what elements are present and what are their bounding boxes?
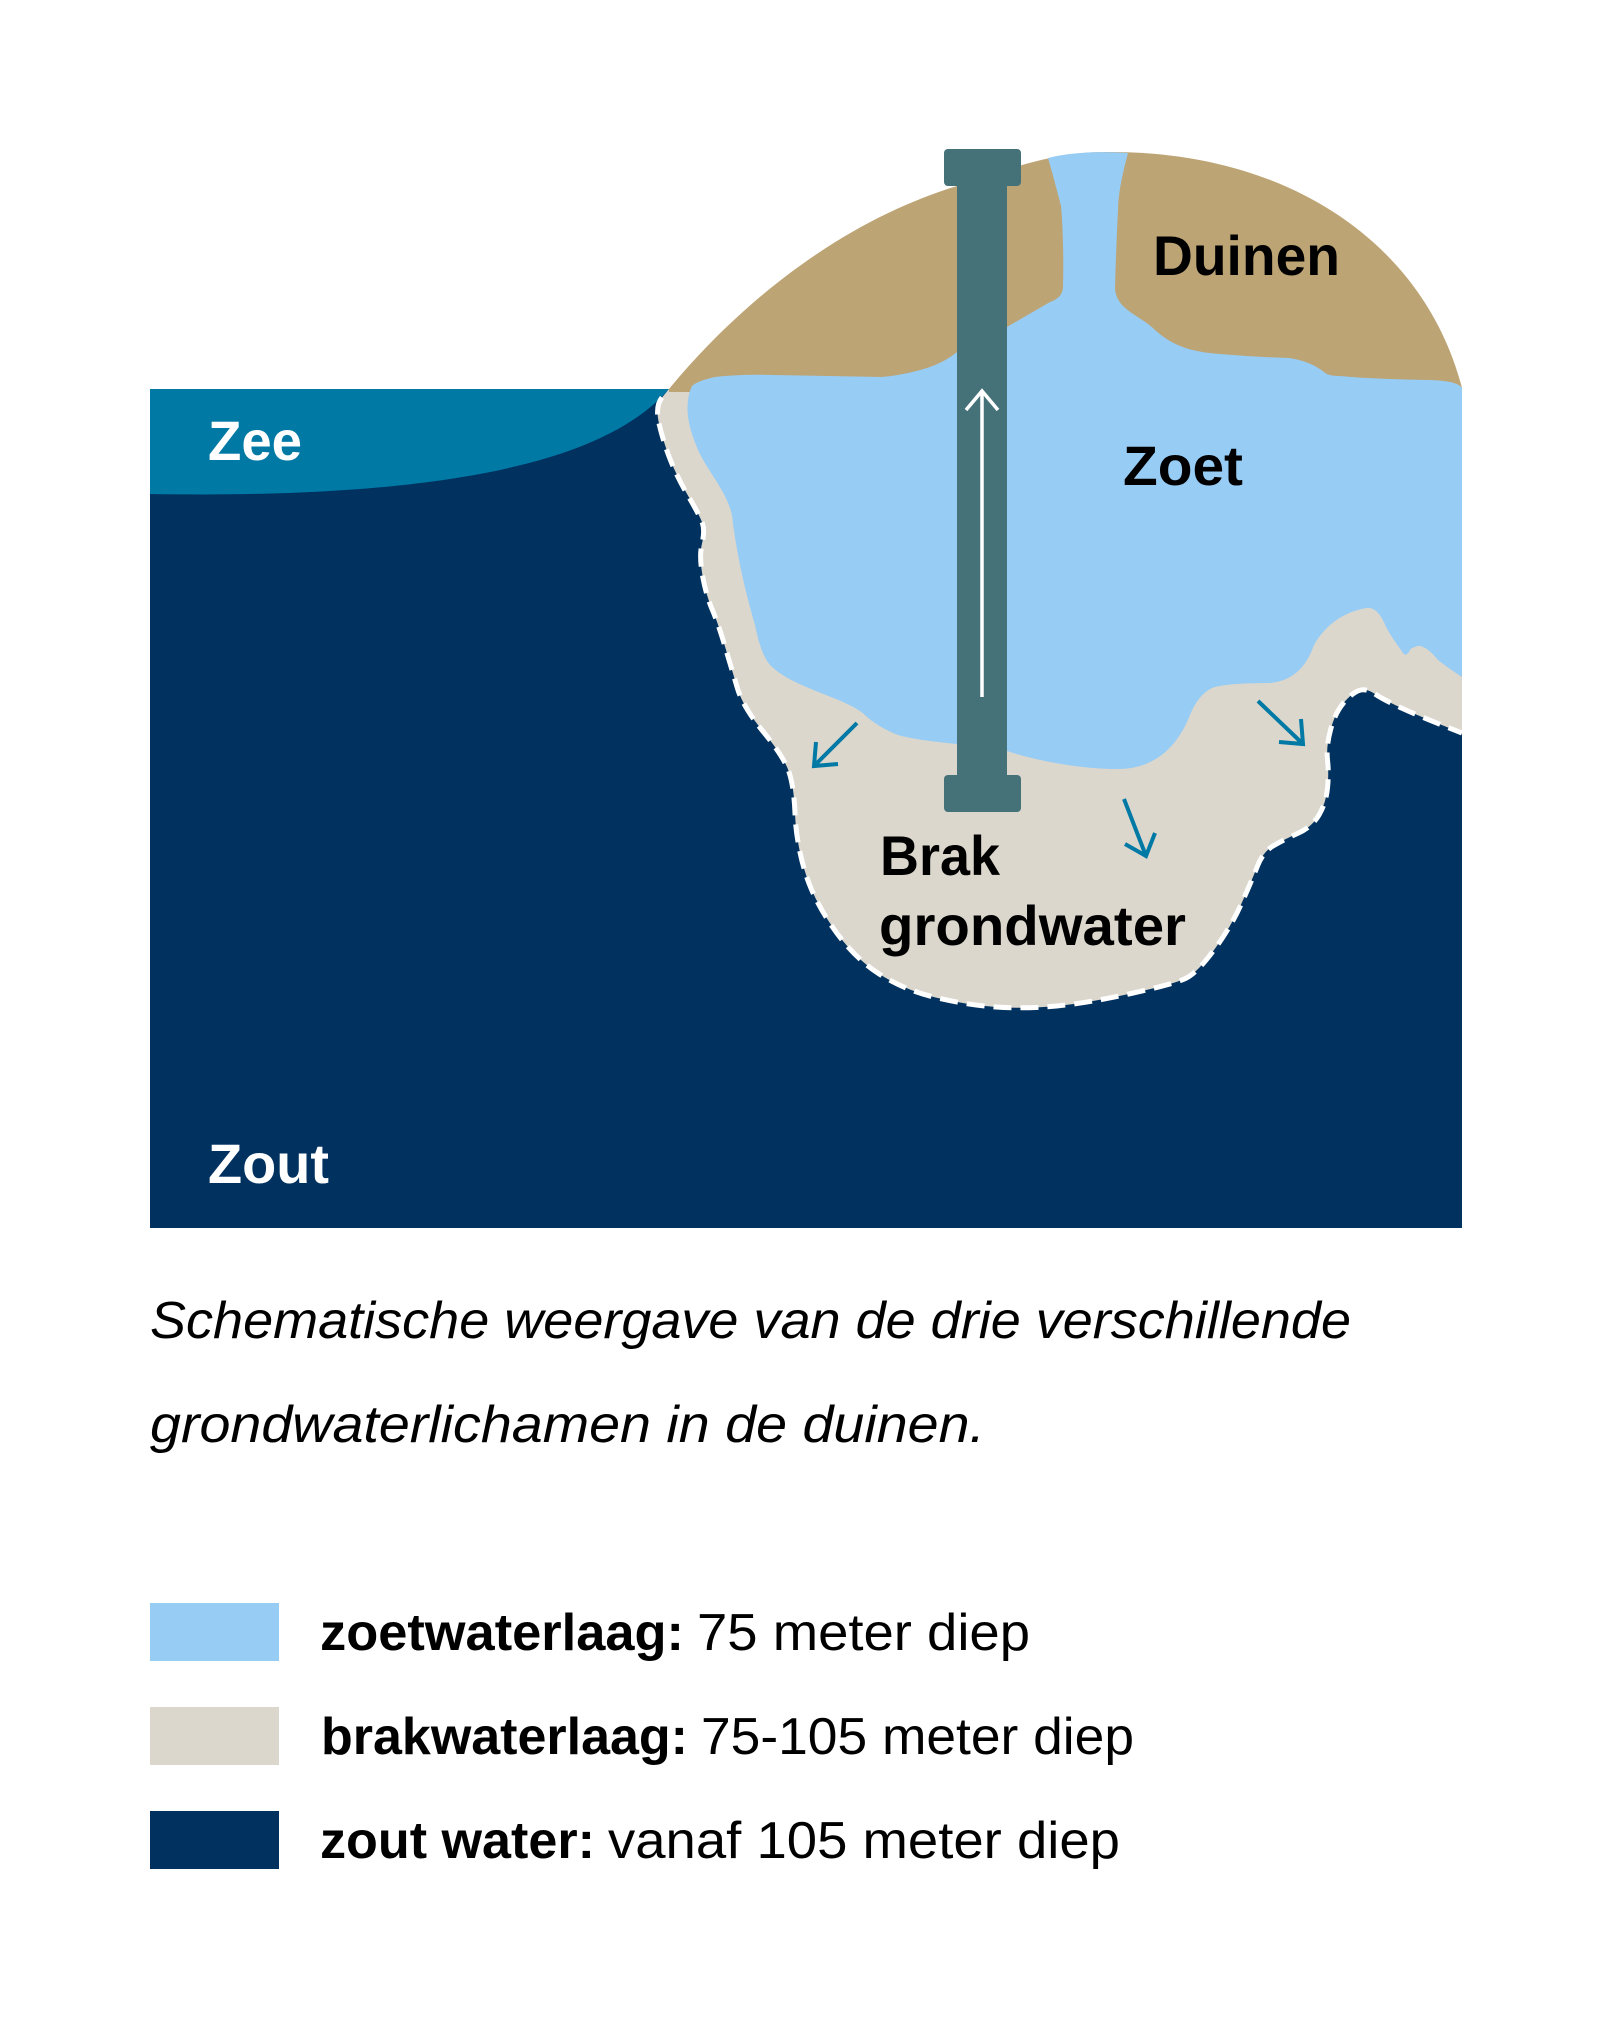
legend item: zoetwaterlaag <box>150 1603 1030 1662</box>
legend item: zoetwaterlaag: 75 meter diep <box>697 1604 1030 1662</box>
legend item: brakwaterlaag: brakwaterlaag: <box>321 1708 688 1766</box>
legend item: brakwaterlaag: 75-105 meter diep <box>701 1708 1134 1766</box>
legend item: zout water: vanaf 105 meter diep <box>608 1812 1120 1870</box>
arrow: pumped water upward <box>966 391 998 697</box>
diagram: dune groundwater cross-section <box>150 149 1462 1228</box>
arrow: brackish flow down <box>1124 799 1155 856</box>
label: Zout: Zout <box>208 1132 329 1195</box>
panel: dunes <box>669 152 1462 392</box>
caption <box>150 1292 1351 1454</box>
caption: Schematische weergave van de drie verschillende <box>150 1292 1351 1350</box>
label: Zoet: Zoet <box>1123 434 1243 497</box>
panel: brackish groundwater <box>658 389 1462 1008</box>
arrow: brackish flow right <box>1258 701 1303 744</box>
label: Brak grondwater <box>879 824 1186 957</box>
label: Zee: Zee <box>208 409 302 472</box>
legend item: brakwaterlaag <box>150 1707 1134 1766</box>
label: Brak grondwater: Brak <box>880 824 1001 887</box>
caption: grondwaterlichamen in de duinen. <box>150 1396 985 1454</box>
label: Duinen: Duinen <box>1153 224 1340 287</box>
label: Brak grondwater: grondwater <box>879 894 1186 957</box>
legend item: zoetwaterlaag: zoetwaterlaag: <box>320 1604 684 1662</box>
arrow: brackish flow left <box>814 723 857 766</box>
panel: sea <box>150 389 669 494</box>
icon: well pipe <box>944 149 1021 812</box>
dashed boundary of brackish water <box>658 398 1462 1008</box>
legend item: zout water: zout water: <box>320 1812 595 1870</box>
legend <box>150 1603 1134 1870</box>
panel: fresh water <box>687 152 1462 769</box>
panel: salt water body <box>150 389 1462 1228</box>
legend item: zout water <box>150 1811 1120 1870</box>
